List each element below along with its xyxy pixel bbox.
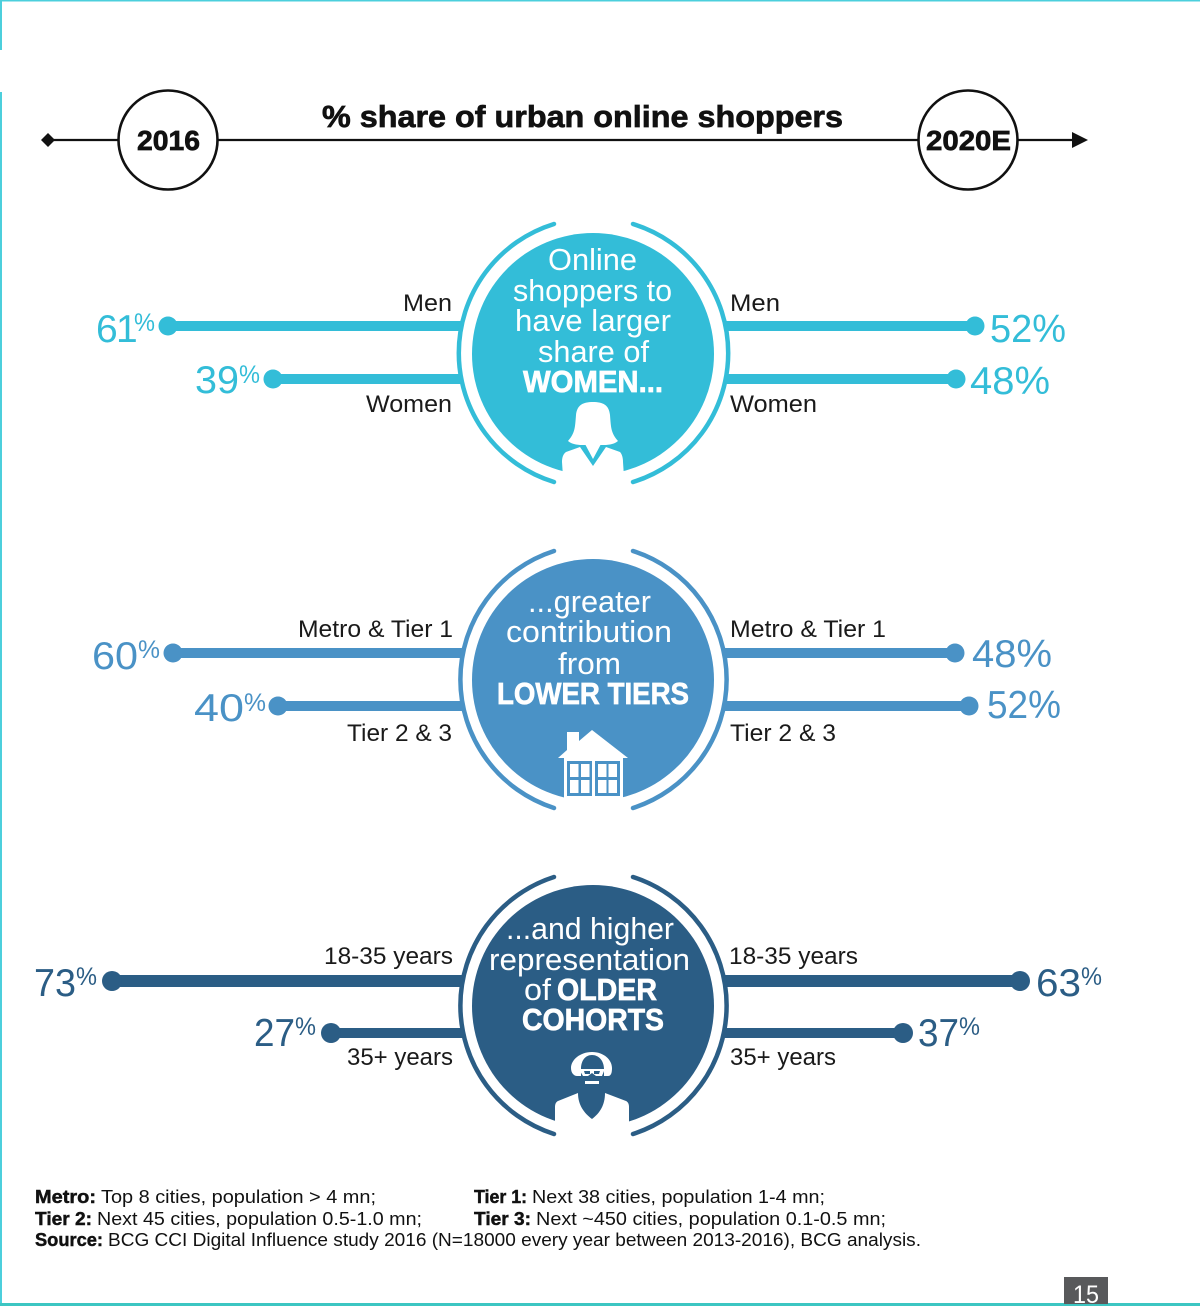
left labels: Men — [403, 290, 452, 317]
circle text: ...greater — [528, 584, 651, 619]
bar: men — [158, 316, 984, 336]
values: % — [959, 1013, 980, 1041]
left labels — [324, 943, 453, 1071]
values: 48% — [970, 360, 1050, 403]
circle text: from — [558, 646, 621, 681]
values: % — [244, 689, 266, 717]
circle text: of — [524, 972, 551, 1007]
left labels — [366, 290, 452, 418]
values: 39 — [195, 359, 239, 402]
left labels: Metro & Tier 1 — [298, 616, 453, 643]
left labels: Tier 2 & 3 — [347, 720, 452, 747]
values: % — [1081, 963, 1102, 991]
right labels — [730, 616, 886, 747]
values — [34, 962, 1102, 1055]
values: % — [239, 361, 260, 389]
left labels: 18-35 years — [324, 943, 453, 970]
page number — [1064, 1277, 1108, 1306]
footnotes: Top 8 cities, population > 4 mn; — [101, 1186, 376, 1207]
icon: woman — [562, 402, 624, 477]
values: 63 — [1036, 962, 1081, 1005]
values: 48% — [972, 633, 1052, 676]
values: % — [134, 309, 155, 337]
values: % — [295, 1013, 316, 1041]
circle text: have larger — [515, 303, 671, 338]
values: % — [138, 636, 160, 664]
bar: metro and tier 1 — [164, 644, 964, 662]
right labels: 35+ years — [730, 1044, 836, 1071]
right labels: 18-35 years — [729, 943, 858, 970]
right labels — [730, 290, 817, 418]
right labels: Metro & Tier 1 — [730, 616, 886, 643]
footnotes: Tier 1: — [474, 1186, 527, 1207]
circle — [472, 559, 714, 801]
title: % share of urban online shoppers — [322, 99, 843, 134]
values — [92, 633, 1061, 730]
circle text: OLDER — [557, 972, 657, 1007]
left labels: 35+ years — [347, 1044, 453, 1071]
bar: tier 2 and 3 — [268, 696, 978, 716]
timeline header — [41, 90, 1088, 190]
bar: women — [264, 370, 966, 388]
footnotes: Tier 3: — [474, 1208, 531, 1229]
footnotes: Next 45 cities, population 0.5-1.0 mn; — [97, 1208, 422, 1229]
right labels: Tier 2 & 3 — [730, 720, 836, 747]
footnotes: Tier 2: — [35, 1208, 92, 1229]
panel: gender — [96, 219, 1066, 487]
right labels — [729, 943, 858, 1071]
circle text: LOWER TIERS — [497, 676, 689, 711]
values: 40 — [194, 687, 244, 730]
circle text: contribution — [506, 614, 672, 649]
values: 60 — [92, 635, 138, 678]
2016 marker: 2016 — [137, 125, 200, 156]
values: % — [76, 963, 97, 991]
circle text: ...and higher — [506, 911, 674, 946]
icon: older man — [555, 1052, 629, 1128]
panel: city tiers — [92, 546, 1061, 814]
bar: 35+ years — [321, 1023, 913, 1043]
circle text: share of — [538, 334, 649, 369]
right labels: Men — [730, 290, 780, 317]
panel: age cohorts — [34, 872, 1102, 1140]
values: 27 — [254, 1012, 295, 1055]
footnotes — [35, 1186, 921, 1250]
left labels — [298, 616, 453, 747]
2020E marker: 2020E — [926, 125, 1011, 156]
values: 73 — [34, 962, 76, 1005]
circle text — [489, 911, 690, 1037]
footnotes: Next ~450 cities, population 0.1-0.5 mn; — [536, 1208, 886, 1229]
footnotes: Metro: — [35, 1186, 96, 1207]
left labels: Women — [366, 391, 452, 418]
circle text: shoppers to — [513, 273, 672, 308]
circle text — [513, 242, 672, 399]
icon: diamond line start — [41, 133, 55, 147]
bar: 18-35 years — [102, 971, 1030, 991]
circle text: Online — [548, 242, 637, 277]
2020E marker — [918, 90, 1018, 190]
values: 37 — [918, 1012, 959, 1055]
right labels: Women — [730, 391, 817, 418]
circle — [472, 233, 714, 475]
footnotes: Next 38 cities, population 1-4 mn; — [532, 1186, 825, 1207]
values: 52% — [987, 684, 1061, 727]
icon: arrow head — [1072, 132, 1088, 148]
footnotes: Source: — [35, 1229, 103, 1250]
2016 marker — [118, 90, 218, 190]
circle text: COHORTS — [522, 1002, 664, 1037]
circle text: WOMEN... — [523, 364, 663, 399]
ring arcs — [460, 877, 727, 1134]
values: 61 — [96, 308, 138, 351]
values: 52% — [990, 308, 1066, 351]
circle text — [497, 584, 689, 711]
values — [96, 308, 1066, 403]
ring arcs — [459, 224, 728, 482]
circle text: representation — [489, 942, 690, 977]
circle — [472, 885, 714, 1127]
ring arcs — [460, 551, 727, 808]
footnotes: BCG CCI Digital Influence study 2016 (N=18000 every year between 2013-2016), BCG analysis. — [108, 1229, 921, 1250]
icon: house — [558, 730, 628, 802]
